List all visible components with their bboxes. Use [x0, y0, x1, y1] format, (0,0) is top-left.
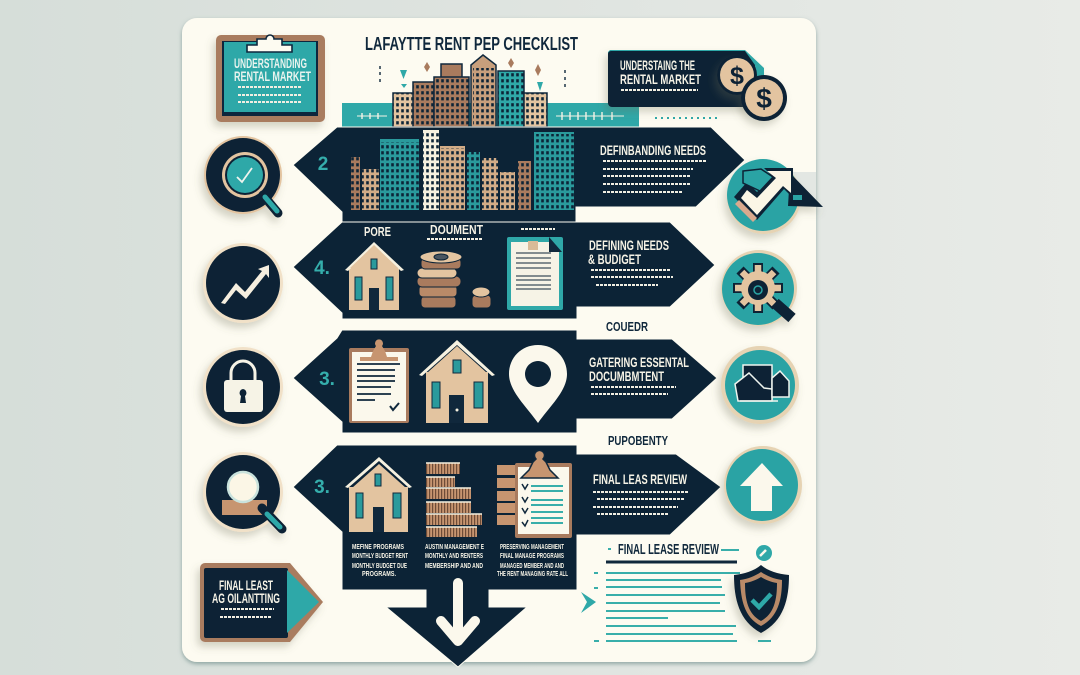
text: column three: FINAL MANAGE PROGRAMS: [500, 551, 564, 560]
icon: house step 4: [345, 242, 404, 310]
text: column two: AUSTIN MANAGEMENT E: [425, 542, 484, 551]
arrow: down: [441, 583, 475, 641]
text: column three: PRESERVING MANAGEMENT: [500, 542, 564, 551]
panel: clipboard understanding rental market: [216, 35, 325, 122]
panel: clipboard understanding rental market: UNDERSTANDING: [234, 55, 307, 71]
icon: map pin: [509, 345, 567, 423]
illustration: top skyline: [393, 55, 547, 127]
text: defining needs and budget heading: & BUDIGET: [588, 251, 641, 267]
panel: final lease callout: AG OILANTTING: [212, 590, 280, 606]
icon: top decorations: [380, 58, 565, 91]
icon: trend arrow: [203, 243, 283, 323]
title: LAFAYTTE RENT PEP CHECKLIST: [365, 34, 578, 54]
icon: clipboard step 3: [349, 339, 409, 423]
text: pupobenty label: PUPOBENTY: [608, 433, 668, 448]
panel: final lease review document: [581, 541, 772, 641]
text: column two: [425, 542, 484, 570]
panel: main card: [182, 18, 816, 662]
icon: document with teal frame: [507, 237, 563, 310]
panel: final lease review document: FINAL LEASE REVIEW: [618, 541, 720, 558]
panel: understanding the rental market box: UNDERSTAING THE: [620, 57, 695, 73]
text: column three: MANAGED MEMBER AND AND: [500, 561, 564, 570]
text: defining needs and budget heading: DEFINING NEEDS: [589, 237, 669, 253]
panel: understanding the rental market box: RENTAL MARKET: [620, 71, 701, 87]
icon: house final: [345, 457, 412, 532]
text: couedr label: COUEDR: [606, 319, 648, 334]
illustration: main skyline: [351, 130, 574, 210]
text: documents lines: [591, 387, 676, 394]
panel: understanding the rental market box: [608, 50, 764, 107]
text: column two: MEMBERSHIP AND AND: [425, 561, 483, 570]
text: defining needs heading: DEFINBANDING NEEDS: [600, 142, 706, 158]
text: defining needs lines: [603, 161, 706, 192]
text: column two: MONTHLY AND RENTERS: [425, 551, 483, 560]
panel: dark ribbon step 2: [293, 127, 745, 222]
icon: magnifier with check: [204, 136, 282, 214]
icon: house step 3: [419, 340, 495, 423]
icon: dollar coins: $: [730, 62, 744, 90]
text: column one: PROGRAMS.: [362, 569, 396, 578]
number 4: 4.: [314, 258, 330, 279]
text: budget lines: [591, 270, 673, 285]
text: final lease lines: [593, 492, 688, 514]
panel: dark ribbon step 4: [293, 222, 715, 319]
text: gathering essential documents heading: [589, 354, 689, 384]
decorative notch: [790, 172, 816, 202]
icon: final clipboard checklist: [515, 450, 572, 538]
text: pore: PORE: [364, 224, 391, 239]
icon: coin stack: [417, 251, 491, 308]
panel: final lease callout: FINAL LEAST: [219, 577, 273, 593]
panel: teal city band: [342, 103, 717, 127]
panel: clipboard understanding rental market: RENTAL MARKET: [234, 68, 311, 84]
text: defining needs and budget heading: [588, 237, 669, 267]
text: gathering essential documents heading: DOCUMBMTENT: [589, 368, 664, 384]
text: gathering essential documents heading: GATERING ESSENTAL: [589, 354, 689, 370]
icon: padlock: [203, 347, 283, 427]
icon: teal check arrow: [727, 159, 823, 234]
text: final lease review heading: FINAL LEAS REVIEW: [593, 471, 688, 487]
text: column one: MONTHLY BUDGET DUE: [352, 561, 407, 570]
panel: dark ribbon final step: [293, 445, 721, 667]
number 3 final: 3.: [314, 477, 330, 498]
panel: final lease callout: [200, 563, 323, 642]
text: column one: [352, 542, 408, 578]
text: column one: MEFINE PROGRAMS: [352, 542, 404, 551]
number 2: 2: [318, 154, 328, 175]
icon: teal gear: [721, 250, 797, 326]
icon: dollar coins: [717, 55, 787, 121]
text: column three: [497, 542, 568, 578]
icon: up arrow: [724, 446, 802, 524]
icon: dollar coins: $: [756, 83, 772, 114]
number 3: 3.: [319, 369, 335, 390]
panel: dark ribbon step 3: [293, 330, 717, 433]
text: document: DOUMENT: [430, 222, 483, 237]
text: column one: MONTHLY BUDGET RENT: [352, 551, 408, 560]
icon: final coin stacks: [426, 463, 515, 537]
text: column three: THE RENT MANAGING RATE ALL: [497, 569, 568, 578]
icon: magnifier with ruler: [203, 452, 283, 532]
icon: shield check: [734, 565, 789, 633]
icon: houses and document: [721, 346, 799, 424]
